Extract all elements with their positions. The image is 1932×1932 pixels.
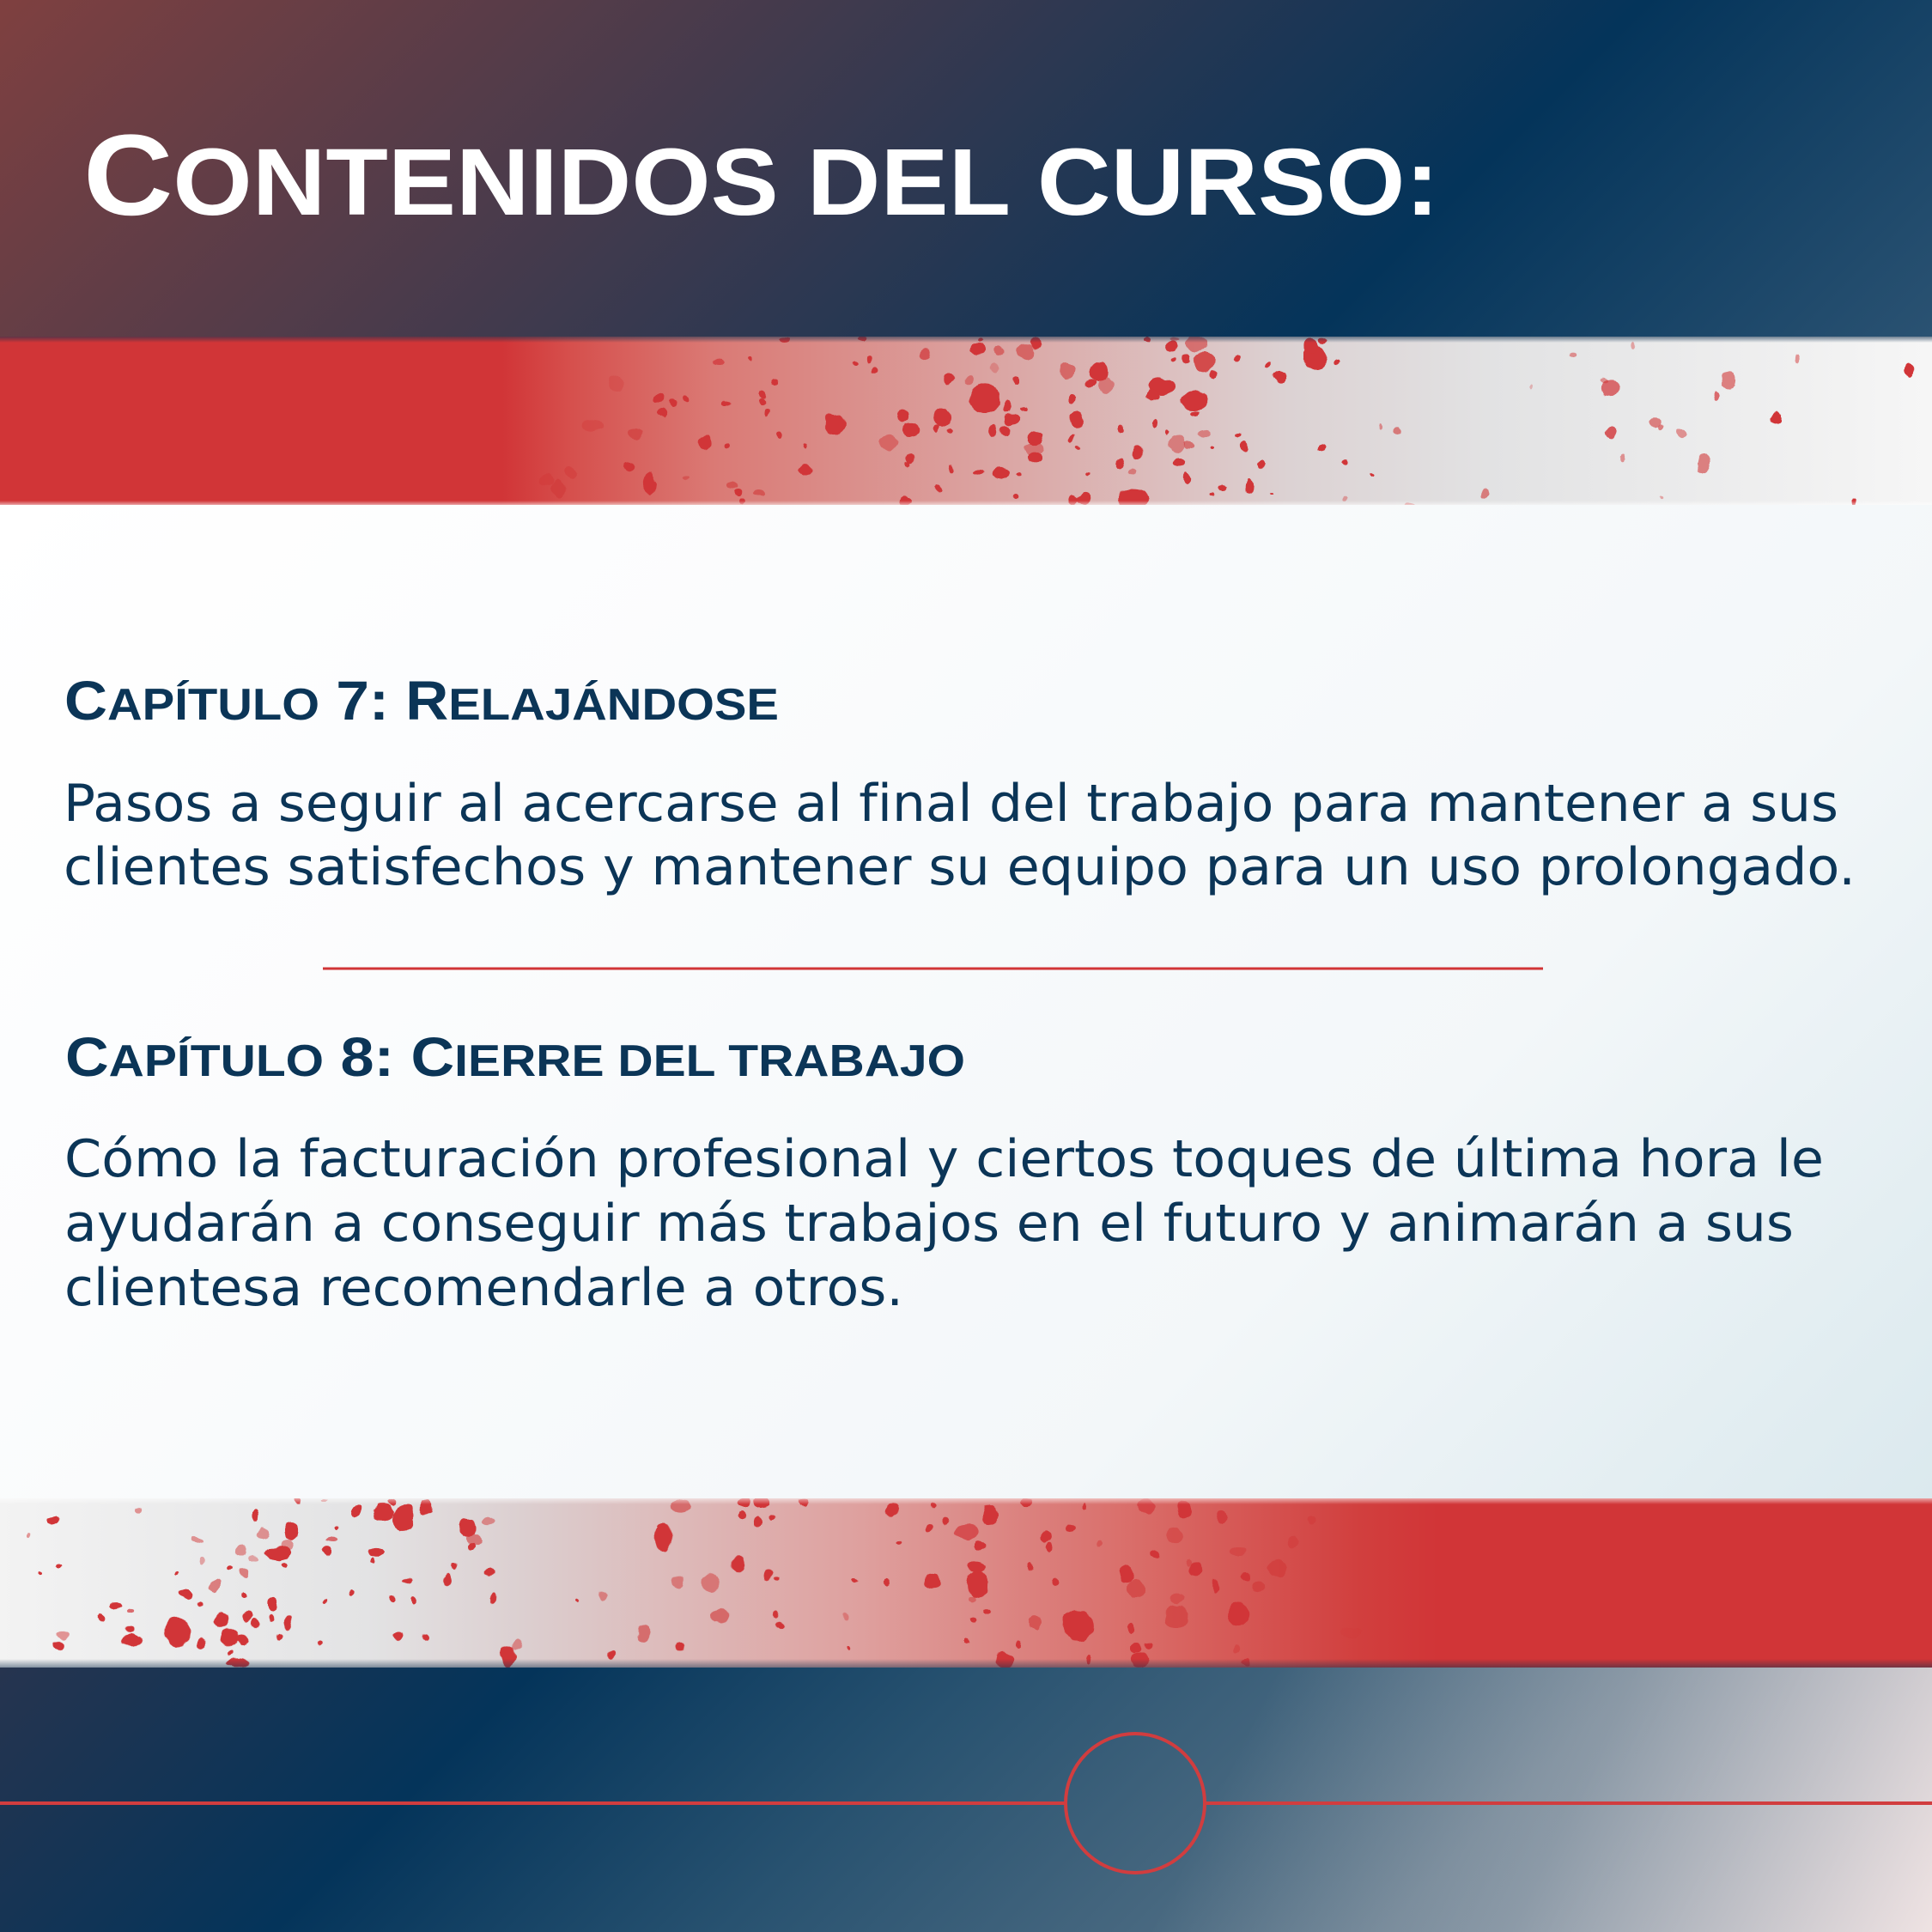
bottom splatter band xyxy=(0,1498,1932,1668)
text: chapter 8 description xyxy=(64,1129,1824,1318)
footer line with circle xyxy=(0,1734,1932,1873)
text: chapter 8 description: ayudarán a conseguir más trabajos en el futuro y animarán a sus xyxy=(64,1194,1794,1254)
text: chapter 8 description: clientesa recomendarle a otros. xyxy=(64,1258,903,1318)
divider line xyxy=(323,967,1543,970)
text: chapter 7 description: Pasos a seguir al acercarse al final del trabajo para mantener a sus xyxy=(64,774,1838,834)
text: chapter 7 description: clientes satisfechos y mantener su equipo para un uso prolongado. xyxy=(64,837,1856,897)
body panel background xyxy=(0,505,1932,1498)
text: chapter 7 description xyxy=(64,774,1856,897)
text: chapter 8 description: Cómo la facturación profesional y ciertos toques de última hora le xyxy=(64,1129,1824,1189)
header band xyxy=(0,0,1932,337)
heading: chapter 7: CAPÍTULO 7: RELAJÁNDOSE xyxy=(64,670,779,732)
footer band xyxy=(0,1668,1932,1932)
title: CONTENIDOS DEL CURSO: xyxy=(83,112,1439,240)
heading: chapter 8: CAPÍTULO 8: C IERRE DEL TRABAJO xyxy=(65,1026,965,1088)
top splatter band xyxy=(0,337,1932,505)
